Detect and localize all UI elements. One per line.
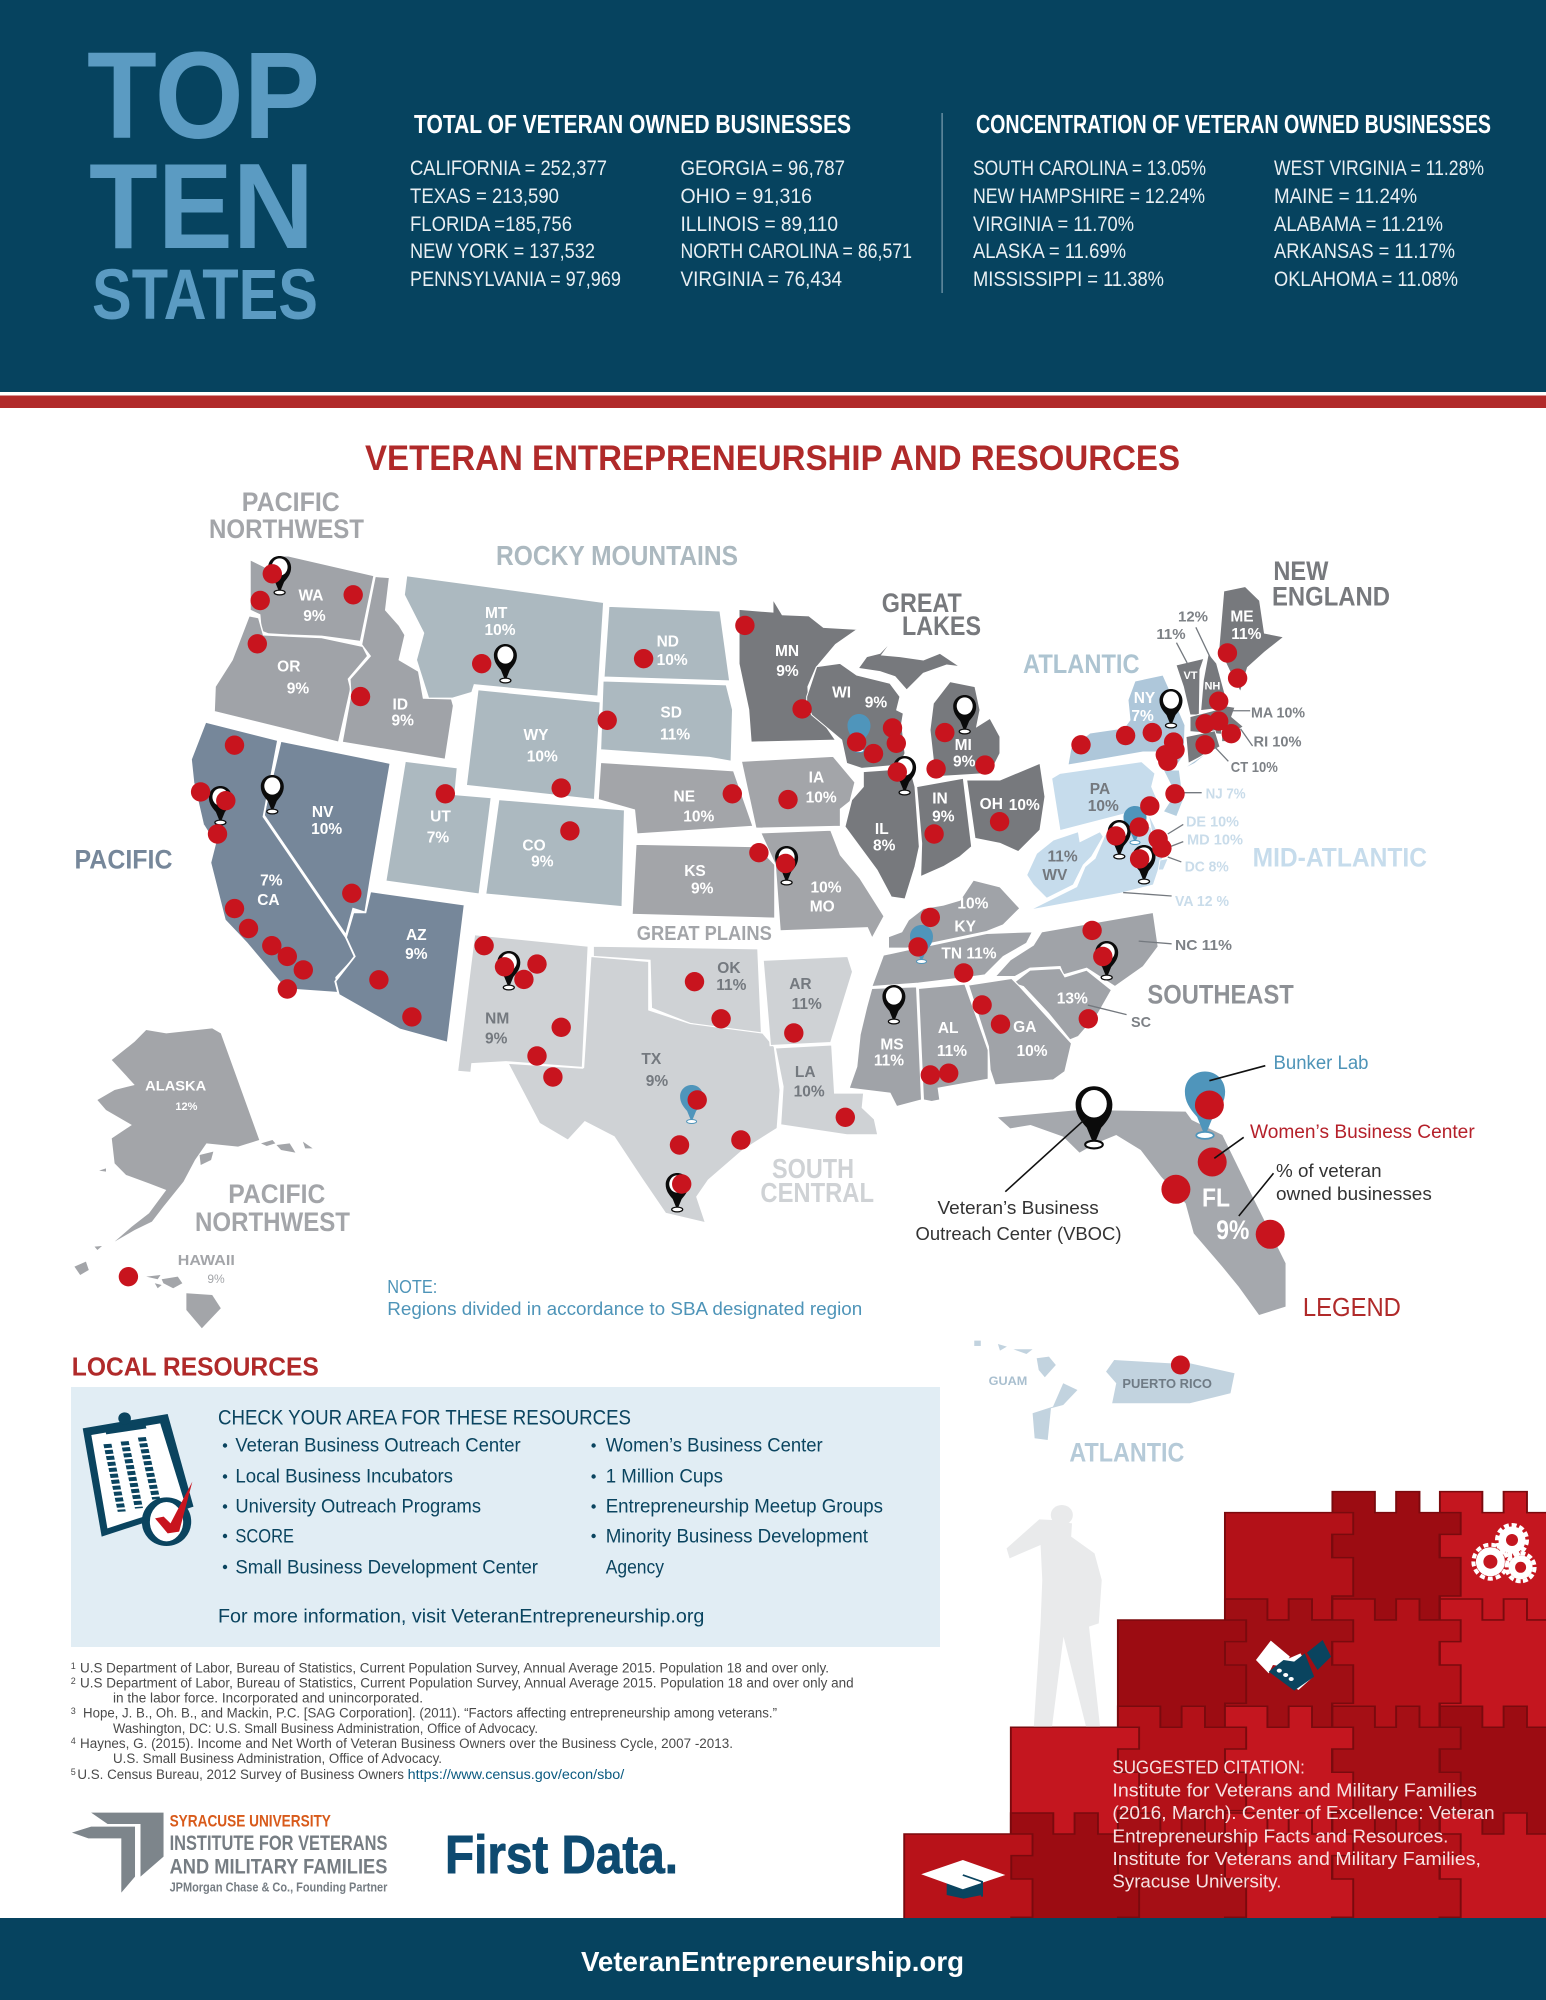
state labels: outside the map: 9%	[207, 1272, 225, 1286]
state labels: white: AL	[938, 1020, 959, 1037]
state labels: grey: 10%	[1088, 798, 1119, 815]
logo text: JPMorgan Chase & Co., Founding Partner	[170, 1880, 387, 1895]
state labels: white: 8%	[873, 837, 896, 854]
footnotes: in the labor force. Incorporated and unincorporated.	[113, 1691, 423, 1706]
state labels: outside the map: HAWAII	[178, 1252, 235, 1269]
state labels: white: 10%	[957, 896, 989, 913]
state labels: white: MS	[880, 1036, 904, 1054]
state labels: white: AZ	[406, 927, 427, 944]
VBOC pins	[209, 556, 1182, 1212]
state labels: white: WY	[524, 727, 549, 744]
logo: first data: First Data.	[445, 1825, 678, 1885]
note: NOTE:	[387, 1277, 437, 1297]
logo text	[170, 1812, 387, 1895]
state labels: white: 10%	[806, 790, 837, 807]
region label: pacific northwest	[209, 487, 364, 544]
state labels: grey: 10%	[794, 1084, 825, 1101]
icon: clipboard with check mark	[83, 1412, 194, 1544]
state labels: outside the map: NC 11%	[1175, 937, 1232, 954]
state labels: outside the map	[178, 609, 1305, 1286]
legend label: VBOC: Veteran’s Business	[938, 1198, 1099, 1218]
region label: pacific northwest (alaska, hawaii): PACIFIC	[228, 1179, 325, 1209]
state labels: white: NY	[1134, 690, 1156, 707]
region: south central states	[457, 935, 878, 1223]
list: total of veteran owned businesses: TOTAL OF VETERAN OWNED BUSINESSES	[414, 109, 851, 139]
region: atlantic and mid-atlantic states	[1027, 675, 1213, 910]
state labels: grey: 9%	[485, 1031, 508, 1048]
suggested citation: (2016, March). Center of Excellence: Veteran	[1112, 1803, 1495, 1823]
legend leader lines	[1005, 1066, 1274, 1216]
state labels: white: IL	[875, 821, 889, 838]
state labels: white: 11%	[1231, 626, 1262, 643]
footnotes: U.S Department of Labor, Bureau of Statistics, Current Population Survey, Annual Average 2015. Population 18 and over only and	[80, 1676, 854, 1691]
state labels: white: 9%	[405, 946, 428, 963]
resources list: right column: Minority Business Development	[606, 1526, 869, 1547]
guam islands	[974, 1341, 1077, 1440]
state labels: white: 10%	[810, 880, 842, 896]
logo text: SYRACUSE UNIVERSITY	[170, 1812, 331, 1831]
resources list: left column	[223, 1436, 539, 1578]
legend label: women's business center: Women’s Business Center	[1250, 1122, 1475, 1143]
list: concentration of veteran owned businesses: NEW HAMPSHIRE = 12.24%	[973, 185, 1205, 208]
legend label: percent of veteran owned businesses: owned businesses	[1276, 1184, 1432, 1204]
region: pacific states	[191, 722, 465, 1043]
state labels: white: 7%	[260, 873, 283, 890]
logo text: INSTITUTE FOR VETERANS	[170, 1832, 387, 1855]
list: concentration of veteran owned businesses: SOUTH CAROLINA = 13.05%	[973, 157, 1206, 180]
dot: puerto rico	[1171, 1356, 1190, 1374]
state labels: white: CO	[522, 837, 546, 854]
state labels: grey: LA	[795, 1064, 816, 1081]
region: rocky mountains states	[386, 576, 733, 907]
state labels: white: OH	[980, 796, 1003, 813]
list: total of veteran owned businesses: NEW YORK = 137,532	[410, 240, 595, 263]
footnotes: U.S. Small Business Administration, Office of Advocacy.	[113, 1751, 442, 1766]
region label: great lakes	[882, 588, 981, 641]
region label: pacific northwest (alaska, hawaii)	[195, 1179, 350, 1237]
region: alaska and hawaii	[74, 1028, 313, 1328]
state labels: grey: AR	[789, 976, 812, 993]
state labels: grey: 11%	[792, 996, 822, 1013]
state labels: white: NV	[312, 804, 334, 821]
state labels: white: OR	[277, 658, 300, 675]
state labels: outside the map: 11%	[1156, 626, 1186, 643]
state labels: white: 9%	[953, 753, 976, 770]
resources list: left column: Veteran Business Outreach Center	[235, 1436, 521, 1457]
list: total of veteran owned businesses	[410, 109, 912, 291]
state labels: outside the map: 12%	[1178, 609, 1208, 626]
legend icon: bunker lab pin	[1185, 1072, 1225, 1139]
header band	[0, 0, 1546, 392]
icon: graduation cap	[921, 1860, 1005, 1899]
logo: institute for veterans and military families	[72, 1812, 387, 1895]
puzzle tiles	[904, 1492, 1546, 1941]
state labels: white: 9%	[531, 854, 554, 870]
state labels: white: ID	[393, 697, 408, 714]
state labels: white: 11%	[937, 1043, 967, 1060]
region label: atlantic (territories): ATLANTIC	[1069, 1438, 1184, 1468]
panel: local resources	[71, 1387, 940, 1647]
state labels: white: 10%	[683, 809, 715, 826]
state labels: white: WA	[299, 588, 323, 604]
state labels: white: 10%	[527, 748, 558, 765]
region label: pacific northwest (alaska, hawaii): NORTHWEST	[195, 1207, 350, 1237]
more information line: For more information, visit VeteranEntrepreneurship.org	[218, 1607, 704, 1628]
region label: mid-atlantic: MID-ATLANTIC	[1253, 842, 1427, 872]
state labels: white: 12%	[175, 1101, 198, 1113]
heading: top ten states: STATES	[92, 256, 318, 335]
bunker lab pins	[680, 714, 1146, 1124]
region: great plains states	[598, 756, 884, 938]
list: total of veteran owned businesses: VIRGINIA = 76,434	[680, 268, 842, 291]
footnotes: 4	[71, 1736, 76, 1746]
state labels: white: UT	[430, 808, 451, 825]
footnotes: Washington, DC: U.S. Small Business Administration, Office of Advocacy.	[113, 1721, 538, 1736]
puerto rico island	[1106, 1360, 1235, 1403]
heading: top ten states	[87, 28, 320, 335]
state labels: white: KY	[954, 919, 977, 936]
region: great lakes states	[739, 599, 1045, 899]
resources list: right column: Women’s Business Center	[606, 1436, 823, 1457]
list: total of veteran owned businesses: OHIO = 91,316	[680, 185, 812, 208]
footnotes: 3	[71, 1706, 76, 1716]
list: total of veteran owned businesses: PENNSYLVANIA = 97,969	[410, 268, 621, 291]
state labels: white: MO	[810, 899, 835, 916]
legend label: VBOC	[916, 1198, 1122, 1244]
state labels: white: 10%	[657, 652, 688, 669]
state labels: white: 11%	[660, 726, 690, 744]
region: southeast states	[849, 880, 1158, 1107]
resources list: right column	[591, 1436, 883, 1578]
footnotes: Haynes, G. (2015). Income and Net Worth of Veteran Business Owners over the Business Cycle, 2007 -2013.	[80, 1736, 733, 1751]
women's business center dots	[119, 564, 1247, 1286]
legend label: FL 9%	[1202, 1183, 1249, 1245]
legend icon: VBOC pin	[1076, 1086, 1112, 1148]
state labels: white: 9%	[776, 663, 799, 680]
footnotes: U.S. Census Bureau, 2012 Survey of Business Owners	[77, 1767, 404, 1782]
state labels: outside the map: DC 8%	[1185, 858, 1229, 876]
label: puerto rico: PUERTO RICO	[1122, 1376, 1212, 1391]
state labels: white: 10%	[484, 622, 516, 639]
state labels: white: ALASKA	[145, 1078, 206, 1094]
state labels: white: 10%	[1016, 1043, 1048, 1060]
region label: new england	[1272, 556, 1390, 612]
legend label: FL 9%: 9%	[1216, 1215, 1249, 1245]
suggested citation	[1112, 1757, 1495, 1891]
legend label: FL 9%: FL	[1202, 1183, 1230, 1213]
list: concentration of veteran owned businesses: WEST VIRGINIA = 11.28%	[1274, 157, 1484, 180]
region label: great lakes: LAKES	[902, 611, 981, 641]
footnotes: 5	[71, 1767, 76, 1777]
state labels: white: 9%	[303, 608, 326, 625]
state labels: white: 9%	[287, 680, 309, 698]
logo text: AND MILITARY FAMILIES	[170, 1855, 387, 1878]
region: new england states	[1176, 586, 1284, 763]
heading: top ten states: TEN	[89, 138, 314, 274]
legend label: percent of veteran owned businesses	[1276, 1161, 1432, 1204]
state labels: grey: 11%	[1048, 848, 1078, 866]
region label: pacific northwest: NORTHWEST	[209, 514, 364, 544]
state labels: white: WI	[832, 684, 851, 701]
state labels: white: NE	[674, 788, 695, 806]
state labels: white: MT	[485, 605, 508, 622]
heading: local resources: LOCAL RESOURCES	[72, 1352, 319, 1382]
puzzle staircase	[904, 1492, 1546, 1941]
state labels: white: KS	[684, 863, 706, 880]
heading: top ten states: TOP	[87, 28, 320, 165]
state labels: outside the map: MD 10%	[1187, 832, 1243, 849]
list: concentration of veteran owned businesses: OKLAHOMA = 11.08%	[1274, 268, 1458, 291]
list: total of veteran owned businesses: GEORGIA = 96,787	[680, 157, 845, 180]
region label: new england: NEW	[1273, 556, 1329, 586]
resources list: right column: Entrepreneurship Meetup Groups	[606, 1497, 883, 1518]
title: VETERAN ENTREPRENEURSHIP AND RESOURCES	[365, 439, 1180, 478]
legend label: bunker lab: Bunker Lab	[1274, 1053, 1368, 1074]
list: total of veteran owned businesses: CALIFORNIA = 252,377	[410, 157, 607, 180]
footer band	[0, 1918, 1546, 2000]
state labels: white: 10%	[311, 821, 342, 838]
state labels: grey: OK	[717, 960, 741, 977]
state labels: white: ND	[657, 634, 679, 650]
legend label: percent of veteran owned businesses: % of veteran	[1276, 1161, 1382, 1181]
region label: new england: ENGLAND	[1272, 582, 1390, 612]
state labels: grey: 11%	[716, 977, 747, 994]
region label: south central: CENTRAL	[760, 1177, 874, 1208]
icon: handshake	[1256, 1640, 1331, 1691]
region label: rocky mountains: ROCKY MOUNTAINS	[496, 540, 738, 571]
state labels: grey	[485, 781, 1119, 1101]
footnotes: 1	[71, 1661, 76, 1671]
state labels: white: MI	[955, 737, 972, 754]
footnotes: https://www.census.gov/econ/sbo/	[408, 1767, 625, 1782]
state labels: white: MN	[775, 643, 799, 660]
region label: great plains: GREAT PLAINS	[637, 923, 772, 945]
region label: great lakes: GREAT	[882, 588, 962, 618]
suggested citation: Institute for Veterans and Military Families	[1112, 1781, 1477, 1801]
state labels: outside the map: RI 10%	[1254, 734, 1302, 751]
footnotes: Hope, J. B., Oh. B., and Mackin, P.C. [SAG Corporation]. (2011). “Factors affecting entrepreneurship among veterans.”	[83, 1706, 777, 1721]
state labels: white: 7%	[427, 829, 449, 846]
state labels: white	[145, 588, 1262, 1113]
state labels: white: 11%	[874, 1052, 904, 1070]
state labels: white: IN	[932, 790, 948, 807]
suggested citation: Syracuse University.	[1112, 1871, 1281, 1891]
leader lines for state labels	[1088, 627, 1253, 1015]
footnotes: U.S Department of Labor, Bureau of Statistics, Current Population Survey, Annual Average 2015. Population 18 and over only.	[80, 1661, 829, 1676]
note: Regions divided in accordance to SBA designated region	[387, 1299, 862, 1319]
list: concentration of veteran owned businesses: ALASKA = 11.69%	[973, 240, 1126, 263]
state labels: outside the map: DE 10%	[1186, 813, 1239, 830]
region label: south central	[760, 1153, 874, 1208]
suggested citation: Entrepreneurship Facts and Resources.	[1112, 1826, 1448, 1846]
state labels: white: 9%	[391, 713, 414, 730]
legend icon: women's business center dots	[1161, 1090, 1285, 1249]
state labels: white: 9%	[932, 808, 955, 825]
list: concentration of veteran owned businesses: ARKANSAS = 11.17%	[1274, 240, 1455, 263]
state labels: white: TN 11%	[941, 945, 997, 962]
soldier saluting silhouette	[1007, 1505, 1102, 1727]
resources list: right column: Agency	[606, 1557, 664, 1578]
list: concentration of veteran owned businesses: MAINE = 11.24%	[1274, 185, 1417, 208]
resources list: right column: 1 Million Cups	[606, 1467, 723, 1488]
footnotes	[71, 1661, 854, 1782]
region label: atlantic: ATLANTIC	[1023, 649, 1140, 679]
map: guam and puerto rico	[974, 1341, 1235, 1468]
suggested citation: Institute for Veterans and Military Families,	[1112, 1849, 1481, 1869]
resources list: left column: Local Business Incubators	[235, 1467, 453, 1488]
state labels: white: 7%	[1131, 708, 1154, 725]
state labels: white: IA	[809, 769, 824, 786]
state labels: white: CA	[257, 892, 280, 909]
region label: pacific northwest: PACIFIC	[242, 487, 340, 517]
footnotes: 2	[71, 1676, 76, 1686]
legend	[916, 1053, 1475, 1322]
state labels: white: GA	[1013, 1019, 1036, 1036]
list: concentration of veteran owned businesses: VIRGINIA = 11.70%	[973, 213, 1134, 236]
state labels: grey: PA	[1090, 781, 1110, 798]
state labels: outside the map: VA 12 %	[1175, 893, 1229, 910]
list: concentration of veteran owned businesses: ALABAMA = 11.21%	[1274, 213, 1443, 236]
logo mark: chevrons	[72, 1813, 164, 1893]
resources heading: CHECK YOUR AREA FOR THESE RESOURCES	[218, 1406, 631, 1430]
footer url: VeteranEntrepreneurship.org	[581, 1946, 964, 1977]
state labels: grey: WV	[1042, 867, 1068, 884]
state labels: grey: 9%	[646, 1073, 668, 1090]
legend heading: LEGEND	[1303, 1292, 1401, 1322]
state labels: white: VT	[1183, 670, 1198, 682]
state labels: white: ME	[1230, 609, 1254, 626]
list: total of veteran owned businesses: TEXAS = 213,590	[410, 185, 559, 208]
state labels: outside the map: MA 10%	[1251, 704, 1305, 721]
label: guam: GUAM	[989, 1374, 1027, 1388]
florida state shape	[998, 1110, 1286, 1315]
region label: south central: SOUTH	[772, 1153, 854, 1184]
suggested citation: SUGGESTED CITATION:	[1112, 1757, 1305, 1777]
list: concentration of veteran owned businesses: MISSISSIPPI = 11.38%	[973, 268, 1164, 291]
state labels: white: SD	[660, 704, 682, 721]
region label: pacific: PACIFIC	[74, 844, 172, 874]
legend label: VBOC: Outreach Center (VBOC)	[916, 1224, 1122, 1244]
region label: southeast: SOUTHEAST	[1147, 980, 1294, 1010]
icon: gears	[1473, 1525, 1535, 1581]
resources list: left column: SCORE	[235, 1526, 294, 1547]
map: United States by SBA region	[74, 487, 1427, 1328]
resources list: left column: University Outreach Programs	[235, 1497, 481, 1518]
state labels: outside the map: CT 10%	[1231, 759, 1278, 776]
state labels: white: 13%	[1057, 990, 1088, 1008]
state labels: grey: NM	[485, 1010, 509, 1027]
state labels: outside the map: NJ 7%	[1206, 785, 1246, 802]
list: total of veteran owned businesses: FLORIDA =185,756	[410, 213, 572, 236]
state labels: white: 9%	[865, 695, 887, 712]
state labels: grey: TX	[641, 1051, 662, 1068]
list: concentration of veteran owned businesses	[973, 109, 1491, 291]
resources list: left column: Small Business Development Center	[235, 1557, 539, 1578]
state labels: white: NH	[1204, 681, 1220, 693]
state labels: white: 9%	[691, 880, 714, 897]
list: total of veteran owned businesses: ILLINOIS = 89,110	[680, 213, 838, 236]
state labels: outside the map: SC	[1131, 1014, 1151, 1031]
list: total of veteran owned businesses: NORTH CAROLINA = 86,571	[680, 240, 912, 263]
region: pacific northwest states	[214, 556, 454, 759]
note	[387, 1277, 862, 1319]
state labels: white: 10%	[1009, 797, 1040, 814]
